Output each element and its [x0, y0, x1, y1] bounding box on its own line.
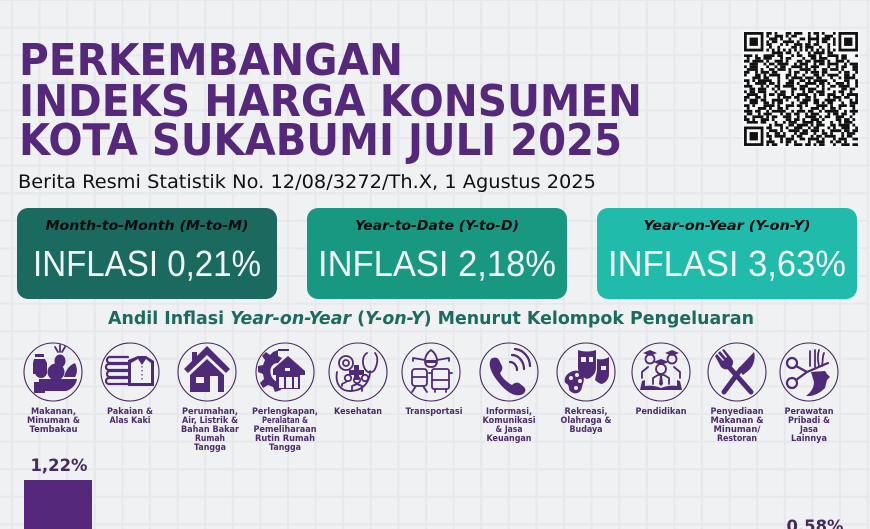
card: year-on-year inflation	[597, 208, 857, 299]
category labels: Pemeliharaan	[254, 425, 316, 435]
category labels: Minuman &	[27, 416, 80, 426]
category labels: Penyediaan	[710, 407, 764, 417]
category labels: Pendidikan	[636, 407, 686, 417]
category labels: Pakaian &	[107, 407, 153, 417]
QR code	[743, 31, 859, 147]
category labels	[27, 407, 834, 453]
category labels: Transportasi	[406, 407, 463, 417]
category labels: Pribadi &	[788, 416, 830, 426]
subtitle: publication reference: Berita Resmi Statistik No. 12/08/3272/Th.X, 1 Agustus 2025	[18, 171, 596, 193]
icon: education	[632, 343, 690, 401]
icon: recreation, sports and culture	[557, 343, 615, 401]
card: month-to-month inflation: INFLASI 0,21%	[33, 243, 261, 284]
category labels: Perawatan	[784, 407, 834, 417]
card: month-to-month inflation	[17, 208, 277, 299]
card: year-to-date inflation: INFLASI 2,18%	[318, 243, 556, 284]
category labels: Makanan &	[710, 416, 764, 426]
title: KOTA SUKABUMI JULI 2025	[19, 115, 622, 166]
category labels: Rekreasi,	[564, 407, 608, 417]
category labels: Olahraga &	[560, 416, 612, 426]
category labels: Tembakau	[30, 425, 78, 435]
title: PERKEMBANGAN	[19, 35, 403, 86]
icon: personal care and other services	[780, 343, 838, 401]
category labels: Air, Listrik &	[182, 416, 238, 426]
title: INDEKS HARGA KONSUMEN	[19, 76, 642, 127]
category labels: Rutin Rumah	[255, 434, 315, 444]
category labels: Budaya	[570, 425, 603, 435]
icon: health	[329, 343, 387, 401]
category labels: Bahan Bakar	[181, 425, 240, 435]
category labels: Alas Kaki	[110, 416, 151, 426]
category labels: Komunikasi	[482, 416, 536, 426]
icon: information, communication and finance	[480, 343, 538, 401]
category labels: & Jasa	[496, 425, 523, 435]
category labels: Restoran	[717, 434, 757, 444]
chart heading: Andil Inflasi Year-on-Year (Y-on-Y) Menurut Kelompok Pengeluaran	[108, 309, 754, 329]
icon: housing and utilities	[178, 343, 236, 401]
category labels: Lainnya	[791, 434, 827, 444]
card: month-to-month inflation: Month-to-Month (M-to-M)	[46, 218, 248, 234]
category labels: Tangga	[269, 443, 301, 453]
card: year-to-date inflation	[307, 208, 567, 299]
category labels: Perlengkapan,	[252, 407, 318, 417]
category labels: Tangga	[194, 443, 226, 453]
icon: food service and restaurants	[708, 343, 766, 401]
category labels: Keuangan	[486, 434, 532, 444]
category labels: Rumah	[195, 434, 225, 444]
category labels: Jasa	[799, 425, 818, 435]
category labels: Informasi,	[486, 407, 532, 417]
icon: household equipment and maintenance	[256, 343, 314, 401]
category labels: Minuman/	[714, 425, 761, 435]
category labels: Peralatan &	[262, 416, 308, 426]
card: year-to-date inflation: Year-to-Date (Y-to-D)	[355, 218, 519, 234]
title	[19, 35, 642, 166]
category labels: Makanan,	[31, 407, 76, 417]
icon: transport	[402, 343, 460, 401]
icon: food, drink and tobacco	[24, 343, 82, 401]
bar: food, drink and tobacco	[24, 456, 92, 529]
bar: food, drink and tobacco: 1,22%	[30, 456, 88, 475]
card: year-on-year inflation: Year-on-Year (Y-on-Y)	[644, 218, 810, 234]
category labels: Perumahan,	[182, 407, 238, 417]
category labels: Kesehatan	[334, 407, 382, 417]
icon: clothing and footwear	[101, 343, 159, 401]
card: year-on-year inflation: INFLASI 3,63%	[608, 243, 846, 284]
